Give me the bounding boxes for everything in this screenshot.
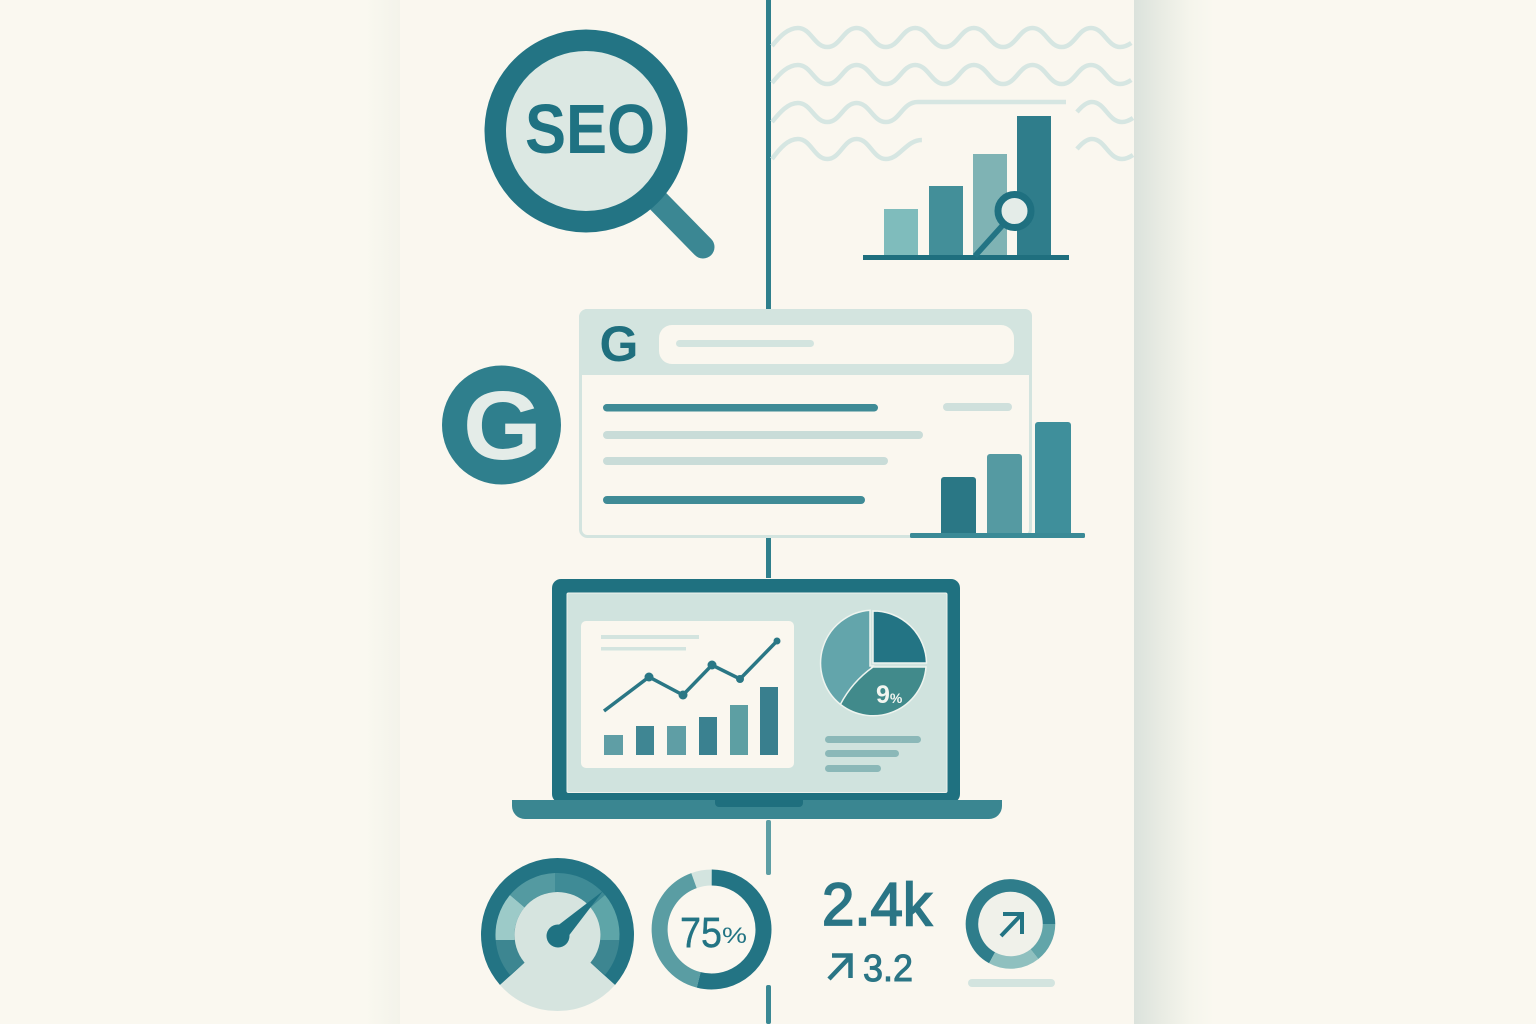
chart: pie (821, 610, 926, 716)
metric: 2.4k: 2.4k (822, 871, 933, 938)
icon: Google badge: G (463, 371, 542, 480)
decorative wave lines (772, 28, 1133, 159)
icon: SEO magnifying glass (495, 40, 703, 247)
icon: small G logo: G (600, 316, 638, 372)
chart card: line and bars (581, 621, 794, 768)
legend lines (825, 736, 921, 772)
metric: arrow and 3.2 (829, 948, 913, 990)
search bar (659, 325, 1014, 364)
icon: laptop (512, 579, 1002, 819)
laptop base (512, 800, 1002, 819)
gauge (481, 858, 634, 1011)
icon: small magnifier (975, 194, 1031, 256)
SEO label: SEO (525, 90, 655, 168)
icon: progress ring with arrow (972, 885, 1049, 962)
metric: arrow and 3.2: 3.2 (863, 948, 913, 990)
donut: 75 percent (660, 878, 763, 981)
chart: rising bars with magnifier (863, 116, 1069, 260)
gauge needle (546, 891, 603, 948)
chart: browser bars (910, 422, 1085, 538)
caption bar under ring (968, 979, 1055, 987)
central vertical timeline (766, 0, 771, 1024)
icon: Google badge (442, 366, 561, 484)
donut: 75 percent: % (722, 923, 747, 948)
donut value: 75 (680, 909, 722, 957)
pie label: 9% (876, 681, 903, 709)
result lines (603, 403, 1012, 504)
panel: search results browser window (579, 309, 1032, 536)
